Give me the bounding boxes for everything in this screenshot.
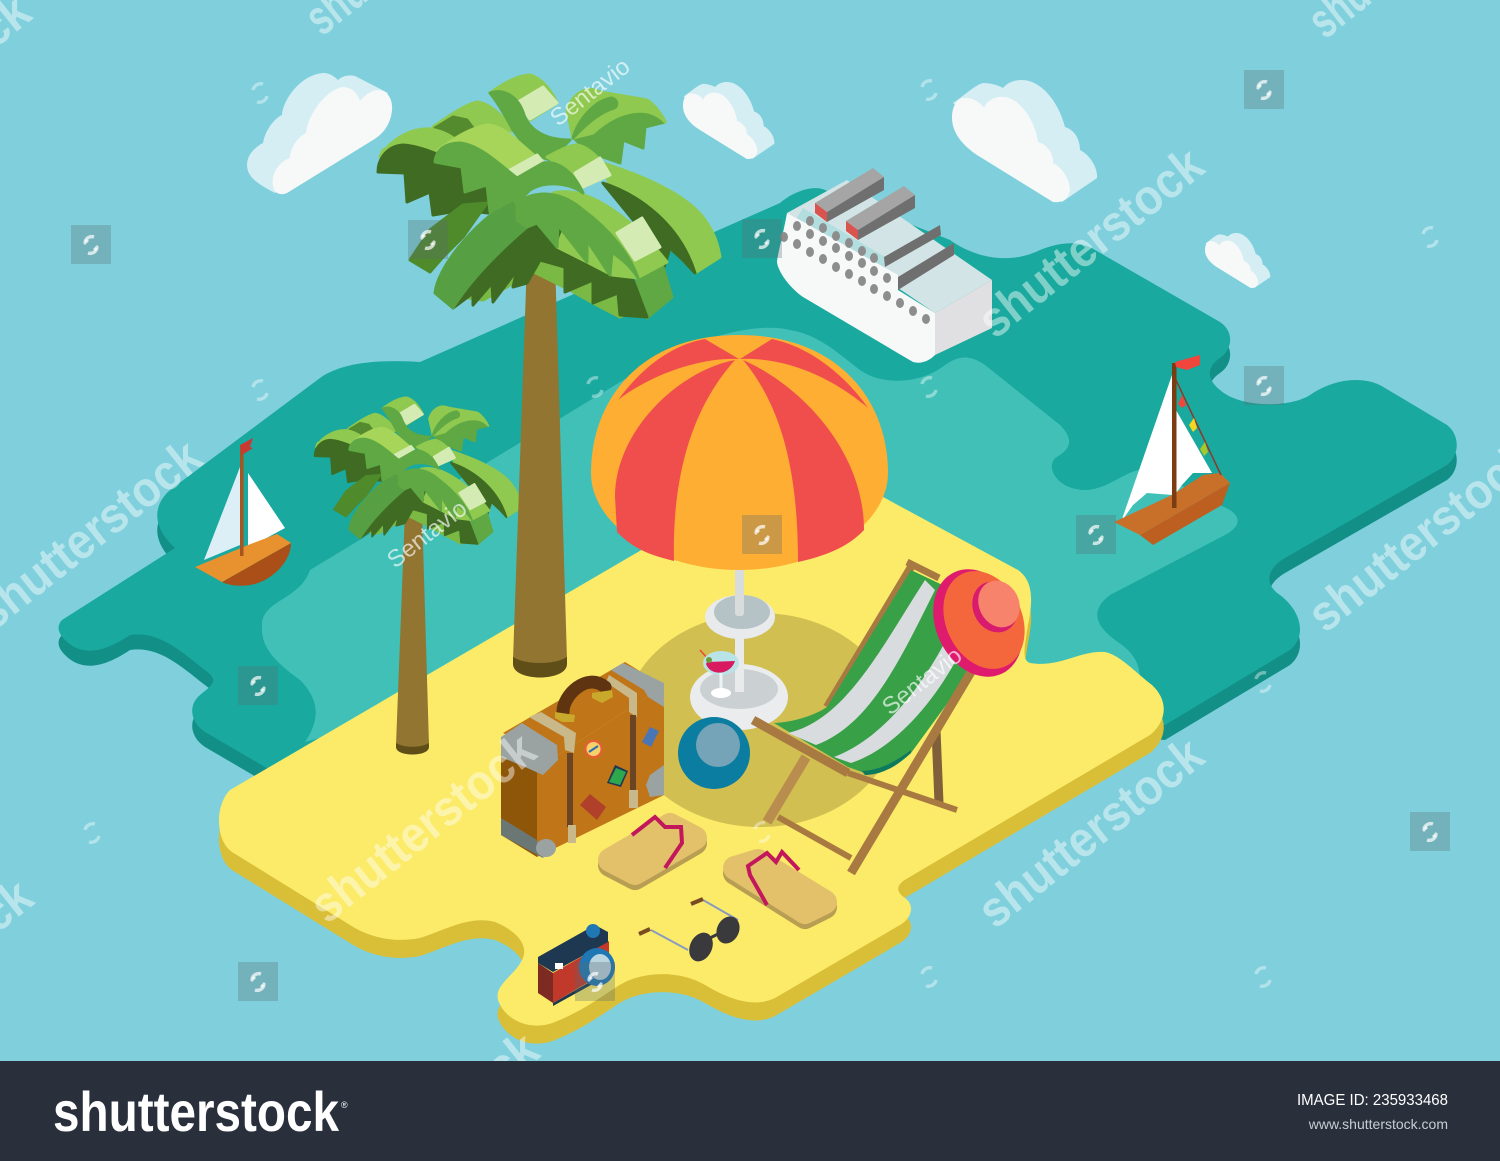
watermark: Sentavio labels: Sentavio [545,53,635,132]
sun hat [916,554,1040,692]
footer bar [0,1061,1500,1161]
registered mark: ® [341,1100,348,1110]
sailboat: right [1114,355,1230,545]
beach umbrella canopy [591,335,888,570]
watermark: square logos [71,70,1450,1001]
flip flop: left [610,817,695,878]
watermark: shutterstock repeated: shutterstock [967,726,1214,939]
watermark: Sentavio labels: Sentavio [877,642,967,721]
umbrella pole and table [690,566,788,730]
watermark: Sentavio labels [382,53,967,721]
cloud: small right [1205,233,1270,288]
yellow sand island [219,490,1164,1044]
sailboat: left [195,438,291,586]
cloud: center top [683,82,774,159]
umbrella shadow on sand [625,613,895,827]
suitcase [501,662,664,858]
website: www.shutterstock.com [1308,1116,1448,1132]
sunglasses [639,899,744,965]
cloud: far left [247,73,392,194]
cloud: large right [952,80,1097,202]
light turquoise lagoon [262,328,1238,742]
beach ball [678,717,750,789]
watermark: Sentavio labels: Sentavio [382,495,472,574]
flip flop: right [735,852,825,917]
image id: IMAGE ID: 235933468 [1297,1092,1448,1109]
deck chair [753,562,974,873]
deep teal sea shelf [59,188,1457,785]
cocktail glass [700,650,739,698]
footer logo: shutterstock [53,1080,340,1143]
watermark: shutterstock repeated: shutterstock [967,136,1214,349]
small palm tree [315,397,522,754]
tall palm tree [378,75,720,678]
cruise ship [777,168,992,363]
watermark: shutterstock repeated: shutterstock [299,721,546,934]
camera [538,924,615,1006]
watermark: shutterstock repeated: ck [475,1021,549,1096]
